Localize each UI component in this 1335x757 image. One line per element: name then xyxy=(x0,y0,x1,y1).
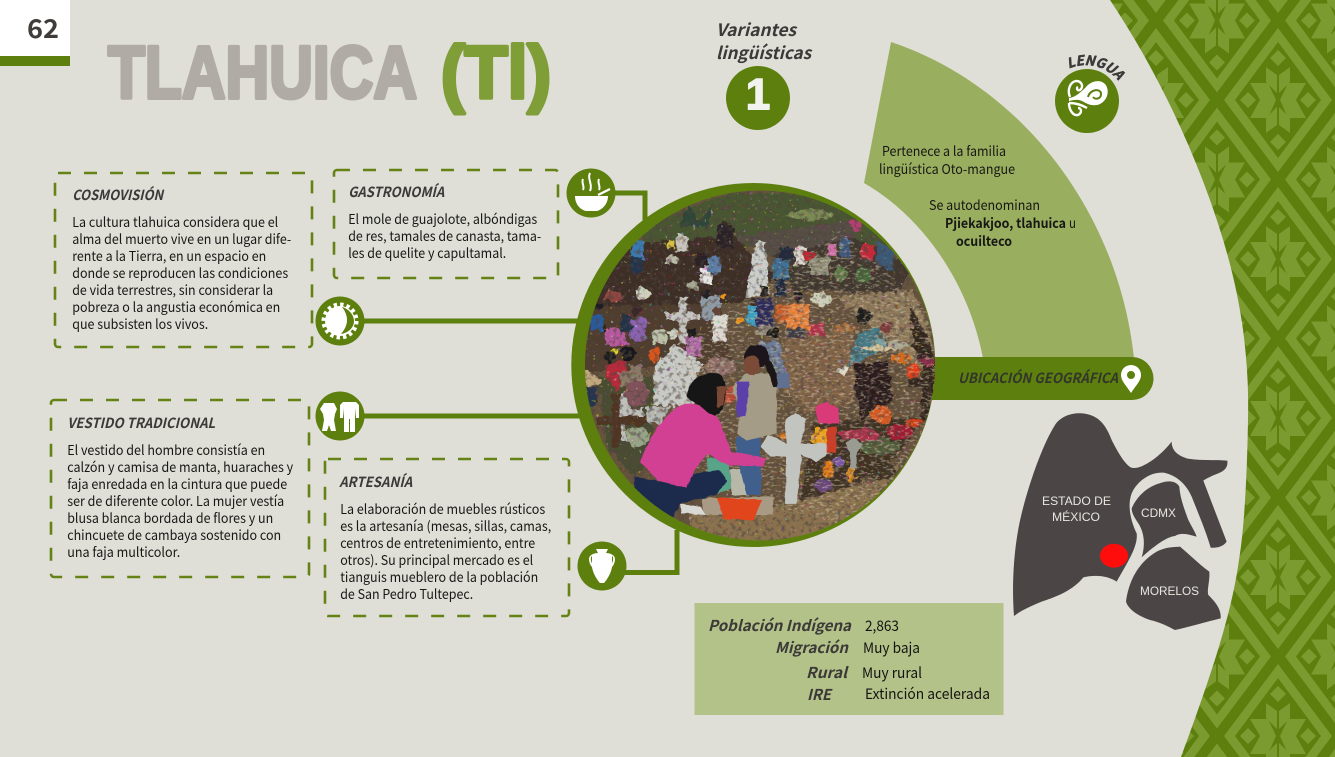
panel: artesanía: centros de entretenimiento, entre xyxy=(340,533,535,552)
panel: gastronomía: les de quelite y capultamal. xyxy=(348,243,506,262)
panel: artesanía: tianguis mueblero de la población xyxy=(340,567,538,586)
panel: gastronomía: de res, tamales de canasta, tama- xyxy=(348,226,541,245)
panel: vestido tradicional: chincuete de cambaya sostenido con xyxy=(67,525,281,544)
panel: population statistics: Muy baja xyxy=(863,637,920,658)
panel: cosmovisión: de vida terrestres, sin considerar la xyxy=(72,280,273,299)
icon: sun and moon xyxy=(316,296,364,346)
icon: traditional clothing xyxy=(316,392,364,440)
photo circle: day of the dead in the cemetery xyxy=(571,183,960,547)
background people xyxy=(583,220,897,420)
panel: population statistics: Migración xyxy=(775,637,849,658)
panel: gastronomía xyxy=(334,170,558,278)
map: Estado de México, CDMX, Morelos: MORELOS xyxy=(1140,584,1199,598)
lengua sector panel: Se autodenominan xyxy=(929,195,1040,214)
lengua sector panel xyxy=(864,42,1134,358)
panel: vestido tradicional: una faja multicolor. xyxy=(67,542,180,561)
panel: artesanía: de San Pedro Tultepec. xyxy=(340,584,473,603)
ubicación geográfica bar xyxy=(925,357,1154,400)
panel: gastronomía: El mole de guajolote, albóndigas xyxy=(348,209,537,228)
map: Estado de México, CDMX, Morelos: CDMX xyxy=(1141,506,1176,520)
lengua sector panel: ocuilteco xyxy=(956,231,1012,250)
panel: cosmovisión: donde se reproducen las condiciones xyxy=(72,263,288,282)
variantes lingüísticas: Variantes xyxy=(716,16,798,41)
panel: vestido tradicional: calzón y camisa de manta, huaraches y xyxy=(67,457,293,476)
panel: cosmovisión: alma del muerto vive en un lugar dife- xyxy=(72,229,291,248)
icon: clay jar xyxy=(578,542,626,590)
panel: population statistics: Muy rural xyxy=(862,662,922,683)
page number tab xyxy=(0,0,70,66)
panel: cosmovisión: COSMOVISIÓN xyxy=(72,185,165,205)
photo texture speckles xyxy=(580,188,960,545)
panel: population statistics xyxy=(694,603,1004,715)
woven textile pattern band xyxy=(1110,0,1335,757)
panel: vestido tradicional: blusa blanca bordada de flores y un xyxy=(67,508,273,527)
variantes lingüísticas: lingüísticas xyxy=(716,39,813,64)
variantes lingüísticas: 1 xyxy=(746,70,770,119)
panel: vestido tradicional xyxy=(51,400,309,577)
lengua sector panel: u xyxy=(1069,213,1076,232)
panel: vestido tradicional: faja enredada en la cintura que puede xyxy=(67,474,287,493)
variantes lingüísticas xyxy=(716,16,813,130)
page number tab: 62 xyxy=(27,9,59,46)
title: TLAHUICA xyxy=(108,31,417,114)
lengua sector panel: lingüística Oto-mangue xyxy=(879,159,1015,178)
panel: cosmovisión: rente a la Tierra, en un espacio en xyxy=(72,246,266,265)
icon: gastronomy bowl xyxy=(566,168,616,218)
front graves and people xyxy=(634,345,863,521)
panel: cosmovisión: La cultura tlahuica considera que el xyxy=(72,212,278,231)
panel: population statistics: IRE xyxy=(807,684,833,705)
lengua sector panel: Pjiekakjoo, tlahuica xyxy=(945,213,1066,232)
panel: artesanía: La elaboración de muebles rústicos xyxy=(340,499,545,518)
panel: vestido tradicional: El vestido del hombre consistía en xyxy=(67,440,265,459)
map: Estado de México, CDMX, Morelos xyxy=(1013,413,1227,630)
flower patches xyxy=(605,256,934,491)
panel: cosmovisión: pobreza o la angustia económica en xyxy=(72,297,280,316)
panel: artesanía: ARTESANÍA xyxy=(338,472,413,492)
lengua sector panel: Pertenece a la familia xyxy=(882,141,1006,160)
title: (Tl) xyxy=(441,31,551,114)
lengua label and icon: LENGUA xyxy=(1068,54,1126,81)
shrines and graves xyxy=(745,240,769,297)
map: Estado de México, CDMX, Morelos: ESTADO DE xyxy=(1042,494,1111,508)
panel: vestido tradicional: VESTIDO TRADICIONAL xyxy=(67,413,215,433)
panel: artesanía: es la artesanía (mesas, sillas, camas, xyxy=(340,516,551,535)
lengua label and icon xyxy=(1055,54,1126,133)
ubicación geográfica bar: UBICACIÓN GEOGRÁFICA xyxy=(958,368,1119,388)
panel: gastronomía: GASTRONOMÍA xyxy=(348,182,445,202)
panel: artesanía xyxy=(325,459,569,616)
map: Estado de México, CDMX, Morelos: MÉXICO xyxy=(1052,509,1100,524)
panel: artesanía: otros). Su principal mercado es el xyxy=(340,550,533,569)
connector lines xyxy=(362,193,677,572)
panel: population statistics: Extinción acelerada xyxy=(865,683,990,704)
panel: population statistics: Población Indígena xyxy=(708,615,852,636)
panel: cosmovisión xyxy=(55,173,312,347)
panel: cosmovisión: que subsisten los vivos. xyxy=(72,314,208,333)
panel: population statistics: Rural xyxy=(806,662,849,683)
panel: population statistics: 2,863 xyxy=(865,615,899,636)
panel: vestido tradicional: ser de diferente color. La mujer vestía xyxy=(67,491,284,510)
